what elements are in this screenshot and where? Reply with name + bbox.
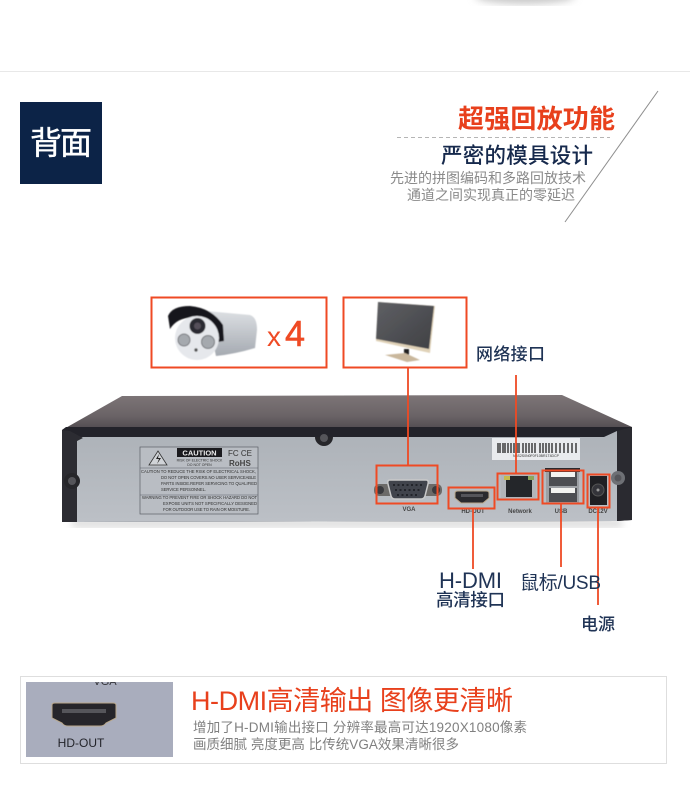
barcode sticker: N3S2S0N0F0F10BR1T4DCP: [513, 454, 560, 458]
panel: HDMI feature: [20, 676, 666, 764]
device rear frame: [62, 427, 632, 522]
port: network: Network: [508, 509, 532, 515]
subheading: mold design: 严密的模具设计: [441, 144, 593, 168]
caution label: DO NOT OPEN: [187, 463, 212, 467]
caution label: SERVICE PERSONNEL.: [161, 487, 206, 492]
section badge: back: [20, 102, 102, 184]
label: mouse USB: 鼠标/USB: [520, 572, 601, 594]
HDMI port photo: [26, 676, 173, 757]
callout: camera x4: 4: [285, 313, 305, 354]
connector: network: [498, 375, 538, 500]
caution label: FC CE: [228, 449, 252, 458]
label: network port: 网络接口: [476, 344, 545, 364]
caution label: WARNING TO PREVENT FIRE OR SHOCK HAZARD DO NOT: [142, 495, 258, 500]
caution label: CAUTION: [182, 448, 217, 458]
port: VGA: VGA: [402, 507, 416, 513]
device body shadow: [72, 520, 622, 527]
device rear face: [77, 431, 617, 522]
device top cover: [62, 395, 632, 430]
label: power: 电源: [581, 615, 615, 634]
screws: [64, 434, 625, 489]
caution label: PARTS INSIDE.REFER SERVICING TO QUALIFIED: [161, 481, 257, 486]
description text: 先进的拼图编码和多路回放技术: [390, 170, 586, 186]
connector: USB: [542, 470, 584, 567]
icon: bullet camera: [168, 306, 257, 360]
port: HDMI: [455, 491, 489, 515]
label: HDMI port: 高清接口: [436, 590, 505, 610]
feature description: 画质细腻 亮度更高 比传统VGA效果清晰很多: [193, 736, 459, 752]
description text: 通道之间实现真正的零延迟: [407, 187, 575, 203]
HDMI port photo: HD-OUT: [58, 736, 105, 750]
caution label: EXPOSE UNITS NOT SPECIFICALLY DESIGNED: [163, 501, 257, 506]
port: USB: USB: [555, 509, 568, 515]
label: HDMI port: H-DMI: [439, 568, 502, 593]
heading block: [390, 91, 658, 222]
top product shadow: [475, 0, 575, 4]
diagram: NVR rear panel: [62, 395, 632, 527]
caution label: RoHS: [229, 459, 251, 468]
caution label: CAUTION TO REDUCE THE RISK OF ELECTRICAL SHOCK,: [141, 469, 256, 474]
section badge: back: 背面: [30, 125, 92, 161]
connector: power: [588, 474, 610, 605]
port: network: [501, 474, 536, 515]
icon: monitor: [376, 302, 435, 362]
caution label: FOR OUTDOOR USE TO RAIN OR MOISTURE.: [163, 507, 250, 512]
caution label: RISK OF ELECTRIC SHOCK: [177, 458, 223, 462]
port: VGA: [374, 480, 442, 513]
heading: playback: 超强回放功能: [458, 104, 615, 134]
HDMI port photo: VGA: [93, 676, 117, 688]
port: DC power: DC12V: [588, 509, 608, 515]
port: DC power: [588, 476, 608, 515]
connector: VGA: [376, 367, 438, 504]
port: USB: [545, 468, 580, 515]
connector: HDMI: [448, 488, 494, 569]
feature heading: H-DMI高清输出 图像更清晰: [191, 686, 513, 716]
feature description: 增加了H-DMI输出接口 分辨率最高可达1920X1080像素: [193, 719, 527, 735]
barcode sticker: [492, 438, 580, 460]
caution label: [140, 447, 258, 514]
callout: camera x4: [152, 298, 326, 368]
port: HDMI: HD-OUT: [461, 509, 485, 515]
multiplier: x: [267, 321, 281, 352]
callout: monitor: [344, 298, 466, 368]
caution label: DO NOT OPEN COVERS.NO USER SERVICEABLE: [161, 475, 256, 480]
